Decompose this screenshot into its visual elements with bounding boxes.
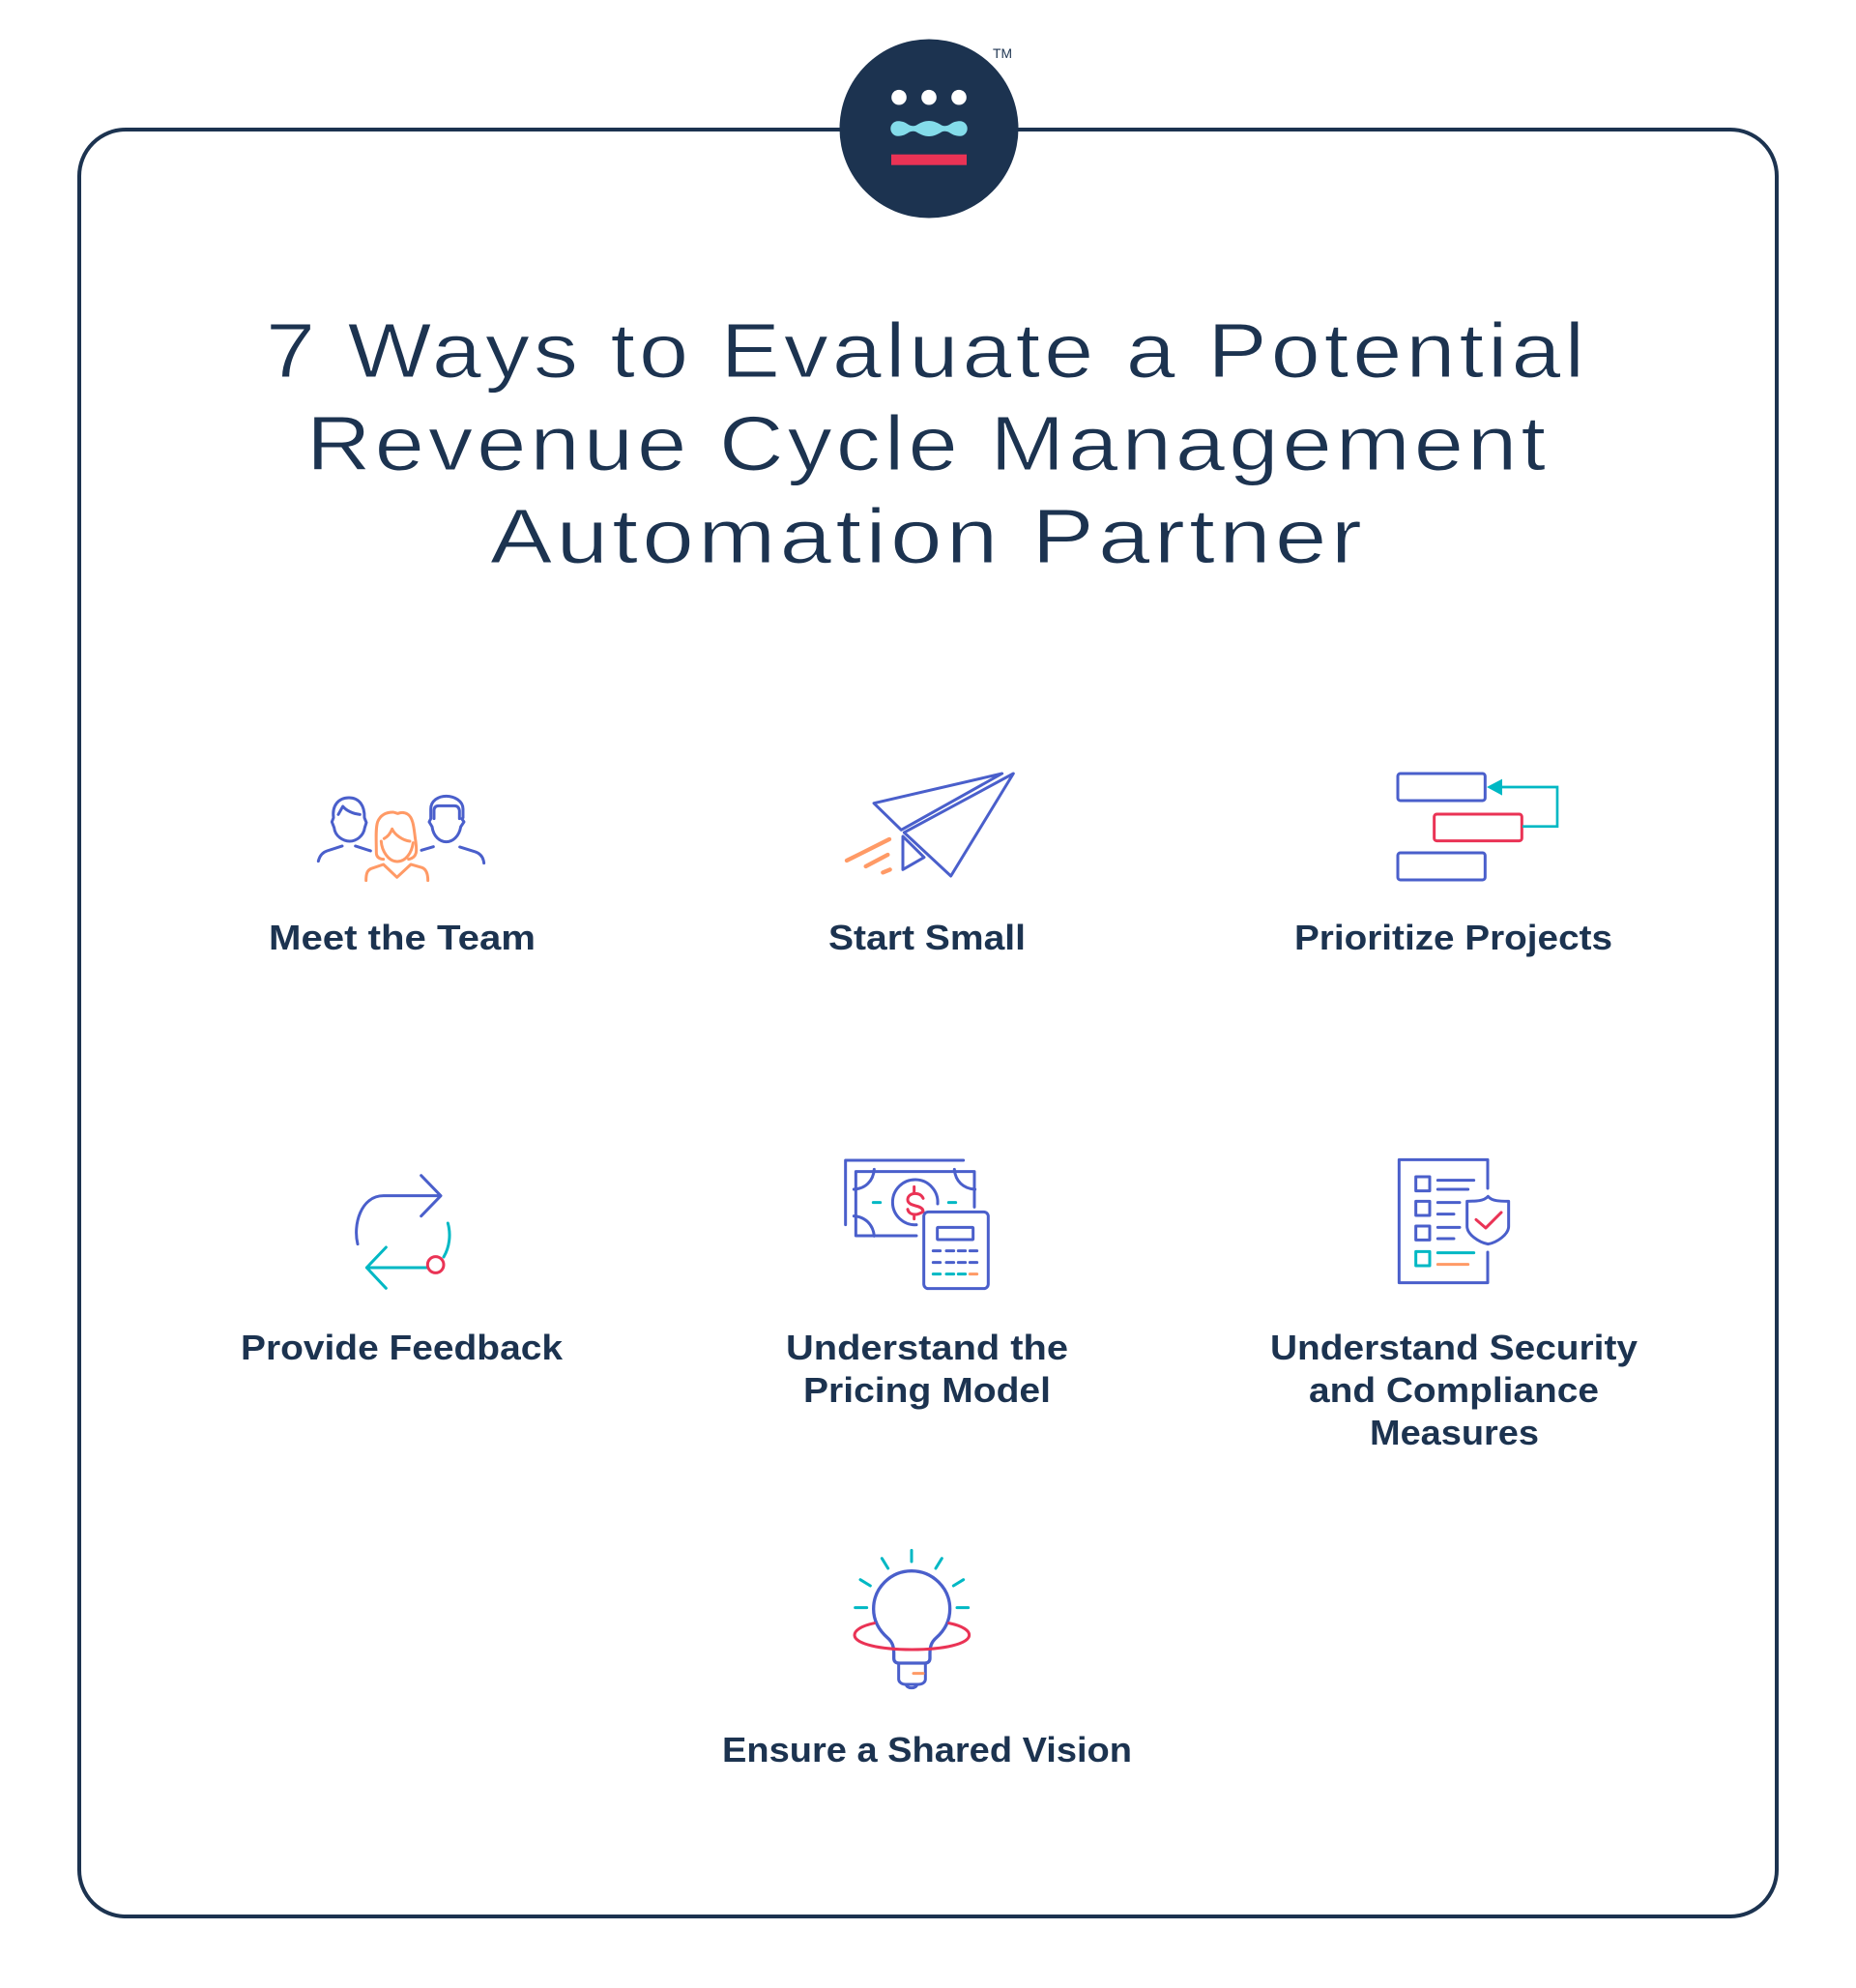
title xyxy=(266,307,1588,579)
label: Understand the Pricing Model: Pricing Model xyxy=(803,1370,1051,1410)
title: 7 Ways to Evaluate a Potential xyxy=(266,307,1588,394)
label: Ensure a Shared Vision: Ensure a Shared Vision xyxy=(722,1730,1132,1769)
label: Prioritize Projects: Prioritize Projects xyxy=(1294,918,1612,957)
label: Understand Security and Compliance Measures: Understand Security xyxy=(1270,1328,1638,1367)
label: Understand Security and Compliance Measures xyxy=(1270,1328,1638,1452)
icon: checklist with shield xyxy=(1399,1159,1509,1283)
label: Start Small: Start Small xyxy=(828,918,1026,957)
icon: team of three people xyxy=(318,796,484,881)
title: Automation Partner xyxy=(490,493,1366,579)
icon: light bulb xyxy=(855,1550,970,1688)
label: Meet the Team: Meet the Team xyxy=(269,918,536,957)
label: Understand Security and Compliance Measures: Measures xyxy=(1370,1413,1539,1452)
label: Understand Security and Compliance Measures: and Compliance xyxy=(1309,1370,1599,1410)
title: Revenue Cycle Management xyxy=(306,400,1550,486)
icon: paper plane xyxy=(847,774,1013,876)
label: Understand the Pricing Model: Understand the xyxy=(786,1328,1068,1367)
label: Provide Feedback: Provide Feedback xyxy=(241,1328,564,1367)
icon: prioritized project bars xyxy=(1398,774,1557,880)
label: Understand the Pricing Model xyxy=(786,1328,1068,1410)
icon: banknote and calculator xyxy=(846,1160,988,1289)
logo badge xyxy=(839,39,1019,219)
logo badge: TM xyxy=(993,45,1012,61)
icon: feedback arrows xyxy=(357,1176,450,1288)
